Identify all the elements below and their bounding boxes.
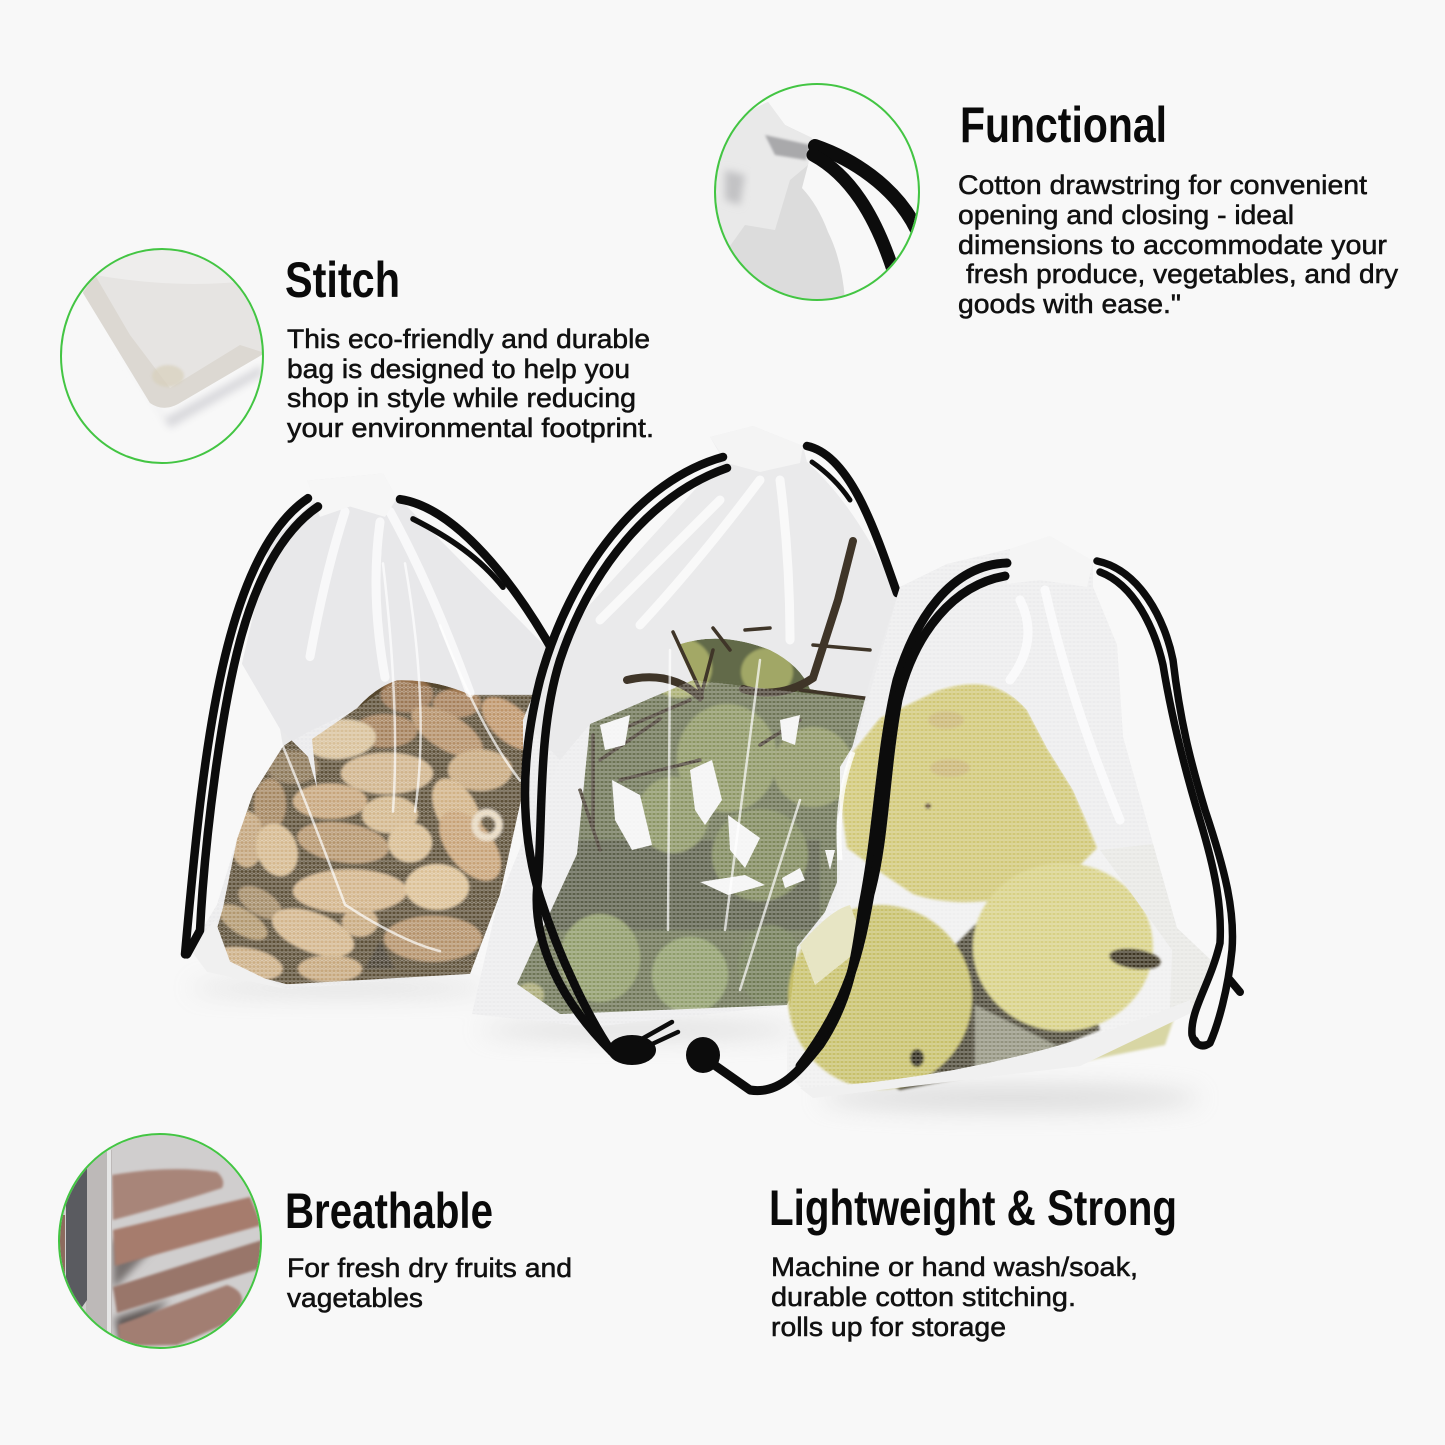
inset circle: stitch detail [55,245,270,470]
bag neck [307,473,397,517]
text: lightweight body: durable cotton stitching. [771,1282,1076,1312]
drawstring [686,561,1240,1091]
knot [686,1037,720,1073]
text: functional body: Cotton drawstring for convenient [958,170,1368,200]
text: functional body: goods with ease." [958,289,1181,319]
bag neck [710,426,803,472]
heading: breathable: Breathable [285,1183,493,1239]
text: functional body [958,170,1399,319]
net veil [523,459,905,841]
text: stitch body: bag is designed to help you [287,354,630,384]
heading: lightweight and strong: Lightweight & Strong [769,1180,1177,1236]
feature: stitch [285,252,654,443]
text: breathable body: For fresh dry fruits and [287,1253,572,1283]
feature: breathable [285,1183,572,1313]
net veil over bag [242,498,550,788]
knot [608,1035,656,1065]
inset circle: drawstring detail [710,80,925,305]
stems [580,541,880,850]
white leaf patches [600,715,835,895]
ground shadows [190,982,1200,1110]
text: stitch body: This eco-friendly and durable [287,324,650,354]
text: lightweight body [771,1252,1138,1342]
text: functional body: fresh produce, vegetables, and dry [966,259,1399,289]
bag: grapes [472,426,905,1065]
text: functional body: opening and closing - ideal [958,200,1294,230]
bag neck [1007,536,1093,587]
heading: stitch: Stitch [285,252,400,308]
drawstring [525,446,897,1065]
text: lightweight body: Machine or hand wash/soak, [771,1252,1138,1282]
text: stitch body: shop in style while reducing [287,383,636,413]
grapes [517,638,865,1014]
pears [788,684,1175,1090]
feature: lightweight and strong [769,1180,1177,1342]
peanuts [218,680,532,984]
text: lightweight body: rolls up for storage [771,1312,1006,1342]
text: functional body: dimensions to accommodate your [958,230,1387,260]
heading: functional: Functional [960,97,1167,153]
inset circle: breathable mesh over hand [55,1130,270,1355]
feature: functional [958,97,1399,319]
text: breathable body: vagetables [287,1283,423,1313]
text: stitch body: your environmental footprint. [287,413,654,443]
drawstring [185,498,550,954]
text: stitch body [287,324,654,443]
bag: pears [686,536,1240,1098]
net veil [851,549,1153,850]
text: breathable body [287,1253,572,1313]
bag: peanuts [185,473,560,1008]
